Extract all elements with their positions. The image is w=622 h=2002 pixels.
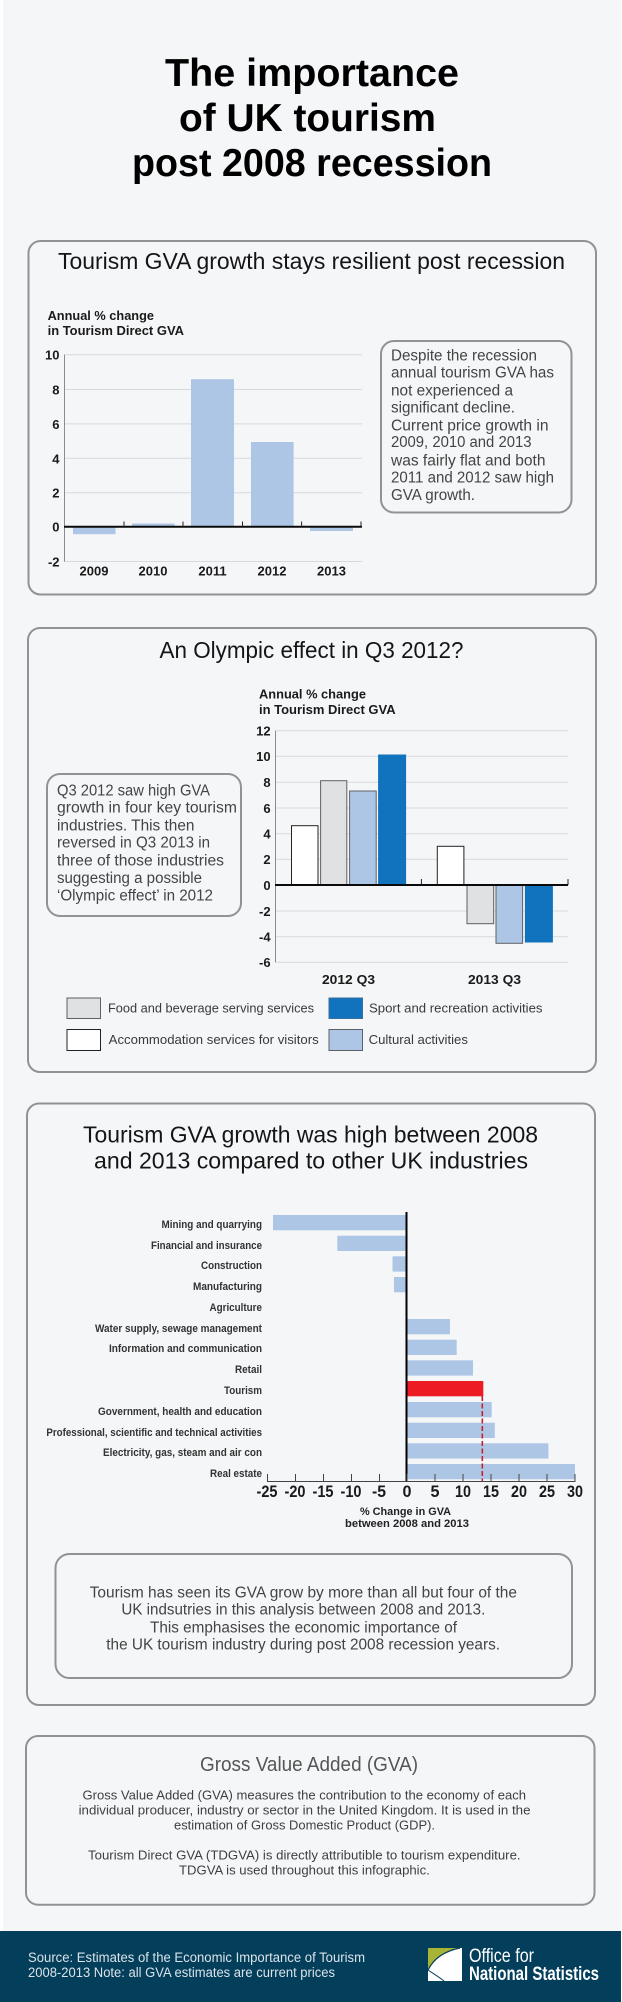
callout: recession text: significant decline.: [391, 399, 515, 416]
source note: Source: Estimates of the Economic Importance of Tourism: [28, 1950, 365, 1965]
source note: 2008-2013 Note: all GVA estimates are current prices: [28, 1965, 335, 1980]
callout: recession text: 2009, 2010 and 2013: [391, 434, 532, 451]
callout: Q3 2012 text: ‘Olympic effect’ in 2012: [57, 888, 213, 905]
legend: [67, 998, 542, 1050]
legend: cultural activities: Cultural activities: [369, 1033, 468, 1047]
bar chart: annual change 2009-2013: [45, 308, 362, 578]
callout: Q3 2012 text: growth in four key tourism: [57, 800, 237, 817]
panel heading: and 2013 compared to other UK industries: [94, 1148, 528, 1174]
axis title: Annual % change: [259, 687, 366, 702]
callout: recession text: Despite the recession: [391, 348, 537, 365]
definition text: [79, 1787, 530, 1877]
panel: tourism GVA growth: [28, 241, 596, 594]
y axis labels: 8: [52, 382, 60, 398]
bars 2012 Q3: [292, 755, 406, 885]
y axis labels: 10: [256, 749, 271, 764]
panel: comparison with other industries: [27, 1104, 595, 1705]
x axis labels: 2012: [258, 563, 286, 578]
x axis labels: 2010: [139, 563, 167, 578]
callout: recession text: was fairly flat and both: [390, 452, 546, 469]
industry labels: Water supply, sewage management: [95, 1323, 262, 1335]
callout: tourism summary: This emphasises the economic importance of: [150, 1619, 458, 1636]
callout: Q3 2012 text: suggesting a possible: [57, 870, 202, 887]
axis title: [48, 308, 185, 338]
bars: [73, 379, 353, 534]
callout: recession text: 2011 and 2012 saw high: [391, 469, 554, 486]
legend: sport and recreation: Sport and recreation activities: [369, 1002, 542, 1016]
industry labels: [46, 1219, 262, 1480]
title: post 2008 recession: [132, 142, 492, 185]
callout: tourism summary: [56, 1554, 572, 1678]
industry labels: Real estate: [210, 1468, 262, 1480]
bars: [273, 1215, 575, 1479]
x axis labels: 2013: [317, 563, 346, 578]
callout: tourism summary: Tourism has seen its GVA grow by more than all but four of the: [90, 1585, 517, 1602]
y axis labels: 2: [52, 486, 60, 501]
panel heading: [83, 1122, 538, 1174]
x axis labels: 2012 Q3: [322, 972, 375, 987]
logo wordmark: Office for: [469, 1946, 535, 1967]
callout: recession text: not experienced a: [391, 382, 513, 399]
industry labels: Tourism: [224, 1385, 262, 1397]
x axis labels: -10: [340, 1483, 362, 1501]
legend: cultural activities: [329, 1030, 468, 1050]
legend: food and beverage: Food and beverage serving services: [108, 1002, 314, 1016]
bar chart: quarterly change by industry: [256, 687, 568, 987]
x axis labels: 2009: [80, 563, 108, 578]
x axis labels: -20: [284, 1483, 306, 1501]
x axis labels: 30: [567, 1483, 583, 1501]
callout: tourism summary: the UK tourism industry during post 2008 recession years.: [106, 1636, 500, 1653]
x axis labels: -15: [312, 1483, 334, 1501]
x axis labels: 15: [483, 1483, 499, 1501]
y axis labels: 4: [263, 826, 271, 842]
y axis labels: 6: [52, 417, 60, 432]
bar chart: quarterly change by industry: 2013 Q3: [468, 972, 521, 987]
x axis title: % Change in GVA: [360, 1506, 451, 1518]
y axis labels: -2: [259, 904, 271, 919]
x axis labels: 20: [511, 1483, 527, 1501]
x axis labels: [256, 1483, 583, 1501]
title: [132, 52, 492, 185]
industry labels: Manufacturing: [193, 1281, 262, 1293]
y axis labels: -6: [259, 955, 271, 970]
industry labels: Information and communication: [109, 1343, 262, 1355]
y axis labels: 10: [45, 348, 60, 363]
x axis labels: 5: [430, 1483, 440, 1501]
x axis labels: 10: [455, 1483, 471, 1501]
panel heading: Tourism GVA growth was high between 2008: [83, 1122, 538, 1148]
industry labels: Retail: [235, 1364, 262, 1376]
industry labels: Agriculture: [210, 1302, 262, 1314]
y axis labels: 12: [256, 724, 271, 738]
bar chart: change in GVA by industry: [46, 1212, 583, 1530]
y axis labels: [45, 348, 60, 570]
callout: recession text: annual tourism GVA has: [391, 365, 554, 382]
title: The importance: [165, 52, 459, 95]
panel: Gross Value Added definition: [26, 1736, 594, 1905]
panel heading: Tourism GVA growth stays resilient post recession: [58, 248, 565, 274]
axis title: in Tourism Direct GVA: [259, 702, 396, 717]
x axis labels: 2011: [198, 563, 227, 578]
legend: sport and recreation: [329, 998, 542, 1018]
y axis labels: 0: [263, 878, 271, 893]
panel heading: Gross Value Added (GVA): [200, 1754, 418, 1776]
callout: Q3 2012 text: reversed in Q3 2013 in: [57, 835, 210, 852]
callout: Q3 2012 text: industries. This then: [57, 818, 194, 835]
definition text: estimation of Gross Domestic Product (GDP).: [174, 1817, 435, 1832]
x axis title: [345, 1506, 469, 1530]
industry labels: Construction: [201, 1260, 262, 1272]
legend: food and beverage: [67, 998, 314, 1018]
y axis labels: [256, 724, 271, 970]
logo wordmark: [469, 1946, 599, 1985]
bars 2013 Q3: [437, 846, 552, 943]
callout: recession text: Current price growth in: [391, 418, 548, 435]
x axis labels: [80, 563, 346, 578]
y axis labels: 6: [263, 801, 271, 816]
y axis labels: 2: [263, 852, 271, 867]
tourism bar: [408, 1381, 483, 1396]
panel: Olympic effect: [28, 628, 596, 1072]
y axis labels: 8: [263, 775, 271, 790]
callout: Q3 2012 text: Q3 2012 saw high GVA: [57, 783, 211, 800]
definition text: Gross Value Added (GVA) measures the contribution to the economy of each: [82, 1787, 526, 1802]
x axis labels: 0: [402, 1483, 412, 1501]
callout: recession text: [381, 341, 572, 512]
icon: ONS logo: [428, 1948, 462, 1981]
axis title: in Tourism Direct GVA: [48, 323, 185, 338]
panel heading: An Olympic effect in Q3 2012?: [160, 637, 464, 663]
title: of UK tourism: [179, 97, 436, 140]
industry labels: Government, health and education: [98, 1406, 262, 1418]
industry labels: Electricity, gas, steam and air con: [103, 1447, 262, 1459]
y axis labels: 4: [52, 451, 60, 466]
definition text: individual producer, industry or sector in the United Kingdom. It is used in the: [79, 1802, 530, 1817]
x axis labels: -25: [256, 1483, 278, 1501]
legend: accommodation: Accommodation services for visitors: [109, 1033, 319, 1047]
industry labels: Professional, scientific and technical activities: [46, 1427, 262, 1439]
industry labels: Financial and insurance: [151, 1240, 262, 1252]
definition text: TDGVA is used throughout this infographic.: [179, 1862, 430, 1877]
y axis labels: -4: [259, 930, 271, 944]
industry labels: Mining and quarrying: [162, 1219, 262, 1231]
axis title: Annual % change: [48, 308, 154, 323]
legend: accommodation: [67, 1030, 319, 1050]
tourism reference line: [481, 1396, 483, 1481]
footer: [0, 1931, 621, 2002]
callout: recession text: GVA growth.: [391, 487, 475, 504]
callout: Q3 2012 text: [47, 774, 241, 916]
y axis labels: -2: [48, 554, 60, 570]
axis title: [259, 687, 396, 717]
x axis labels: -5: [372, 1483, 386, 1501]
x axis labels: 25: [539, 1483, 555, 1501]
x axis title: between 2008 and 2013: [345, 1518, 469, 1530]
definition text: Tourism Direct GVA (TDGVA) is directly attributible to tourism expenditure.: [88, 1847, 521, 1862]
y axis labels: 0: [52, 520, 60, 535]
source note: [28, 1950, 365, 1980]
callout: Q3 2012 text: three of those industries: [57, 853, 224, 870]
callout: tourism summary: UK indsutries in this analysis between 2008 and 2013.: [121, 1602, 485, 1619]
